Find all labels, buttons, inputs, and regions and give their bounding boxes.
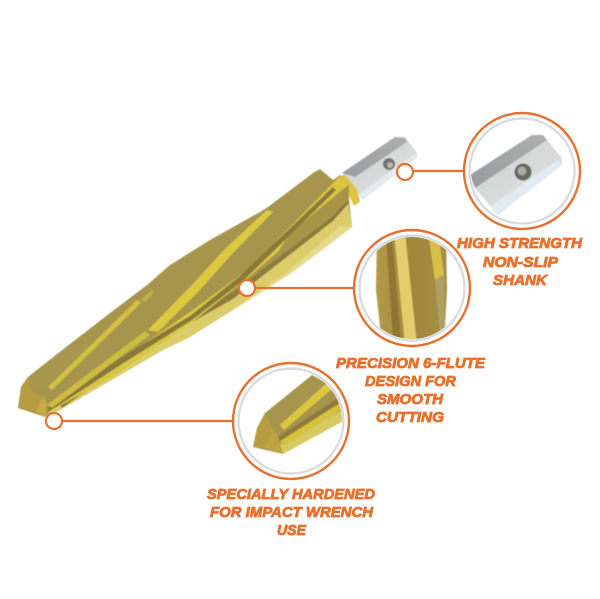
dark flute line: [47, 187, 336, 411]
yellow stripe 2: [148, 210, 273, 332]
caption: flutes: DESIGN FOR: [365, 373, 456, 390]
caption: flutes: PRECISION 6-FLUTE: [336, 355, 486, 372]
detail circle: tip: [233, 363, 349, 479]
caption: flutes: [336, 355, 486, 426]
detail circle: flutes: [354, 230, 470, 346]
callout line: flutes: [255, 287, 354, 289]
marker dot: flutes: [239, 280, 255, 296]
detail circle: shank: [464, 113, 580, 229]
caption: shank: HIGH STRENGTH: [457, 235, 583, 252]
body silhouette: [18, 169, 352, 417]
caption: shank: SHANK: [493, 272, 548, 289]
flute shadow 2: [60, 198, 349, 408]
callout line: shank: [413, 170, 464, 172]
callout line: tip: [62, 420, 233, 422]
yellow stripe 1: [48, 300, 141, 390]
fluted body: [18, 169, 352, 417]
yellow band under dark flute: [52, 176, 349, 408]
caption: tip: USE: [277, 522, 307, 539]
infographic canvas: [17, 112, 583, 536]
tip facets: [18, 377, 43, 412]
caption: tip: SPECIALLY HARDENED: [207, 486, 375, 503]
marker dot: tip: [46, 413, 62, 429]
caption: tip: [207, 486, 375, 539]
caption: tip: FOR IMPACT WRENCH: [210, 504, 374, 521]
caption: shank: [457, 235, 583, 289]
flute face near collar: [278, 186, 349, 252]
caption: flutes: CUTTING: [376, 409, 444, 426]
collar: [338, 175, 360, 206]
pale lower fin: [45, 202, 352, 417]
marker dot: shank: [397, 164, 413, 180]
shank: [342, 137, 417, 200]
drill bit product photo: [18, 137, 417, 417]
caption: shank: NON-SLIP: [483, 254, 559, 271]
caption: flutes: SMOOTH: [377, 391, 444, 408]
